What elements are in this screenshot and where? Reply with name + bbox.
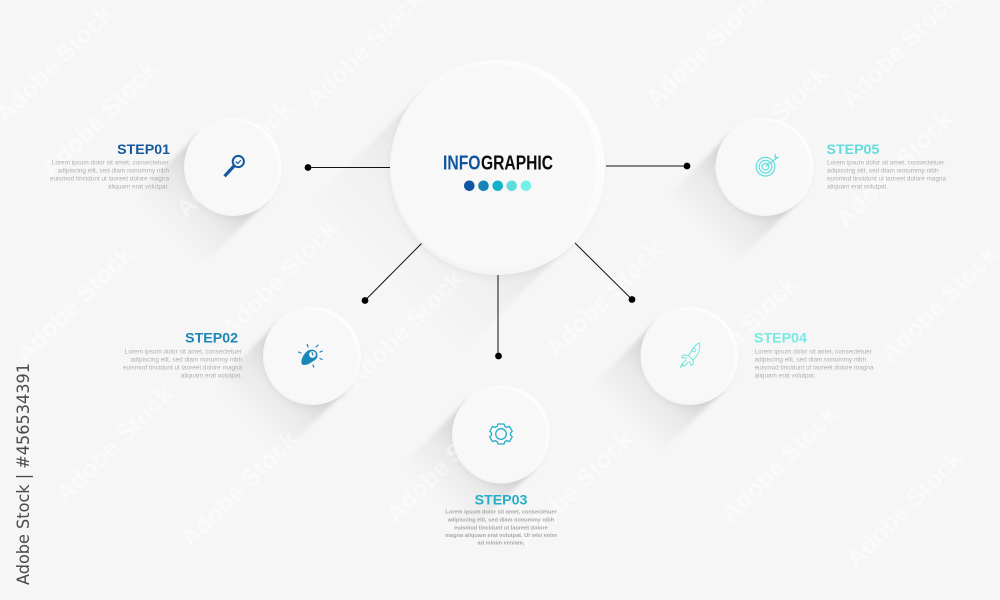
stock watermarks: Adobe Stock [830, 105, 958, 233]
stock watermarks: Adobe Stock [715, 400, 843, 528]
center title dark part: GRAPHIC [481, 152, 553, 174]
step 05 text: aliquam erat volutpat. [827, 184, 888, 190]
stock watermarks: Adobe Stock [170, 95, 298, 223]
step 02 text: Lorem ipsum dolor sit amet, consectetuer [125, 348, 243, 356]
step 05 text [826, 142, 946, 190]
icon: gear [490, 424, 512, 444]
icon: light bulb [298, 344, 322, 367]
step 04 text: adipiscing elit, sed diam nonummy nibh [754, 356, 866, 364]
connector to step 05 [606, 163, 690, 169]
connector to step 02 [362, 243, 422, 304]
icon: target [756, 154, 778, 176]
step 04 circle [640, 307, 738, 407]
stock watermarks: Adobe Stock [675, 270, 803, 398]
step 02 circle [263, 307, 361, 407]
stock watermarks: Adobe Stock [380, 400, 508, 528]
step 02 text: euismod tincidunt ut laoreet dolore magna [123, 364, 242, 372]
stock watermarks: Adobe Stock [540, 235, 668, 363]
icon: rocket [680, 343, 700, 368]
step 03 text: ad minim veniam, [478, 540, 525, 546]
step 04 text: STEP04 [754, 330, 807, 346]
step 03 text [445, 492, 557, 546]
stock watermarks: Adobe Stock [510, 425, 638, 553]
step 02 text: adipiscing elit, sed diam nonummy nibh [130, 356, 242, 364]
step 05 text: euismod tincidunt ut laoreet dolore magna [827, 176, 946, 182]
step 03 circle [452, 386, 550, 486]
stock watermarks: Adobe Stock [50, 380, 178, 508]
stock watermarks: Adobe Stock [175, 425, 303, 553]
step 02 text: aliquam erat volutpat. [181, 372, 242, 380]
stock watermarks: Adobe Stock [875, 240, 1000, 368]
center circle [389, 60, 605, 278]
step 01 circle [184, 118, 282, 218]
step 03 text: Lorem ipsum dolor sit amet, consectetuer [445, 510, 557, 516]
vertical stock id: Adobe Stock | #456534391 [14, 363, 34, 585]
stock watermarks: Adobe Stock [840, 445, 968, 573]
step 01 text: aliquam erat volutpat. [108, 184, 169, 190]
colour dots [464, 180, 531, 191]
connector lines [305, 163, 690, 359]
step 04 text: Lorem ipsum dolor sit amet, consectetuer [754, 348, 873, 356]
step 03 text: STEP03 [475, 492, 528, 508]
step 02 text [123, 330, 243, 380]
step 01 text: STEP01 [117, 142, 170, 158]
step 05 text: STEP05 [826, 142, 879, 158]
stock watermarks: Adobe Stock [340, 265, 468, 393]
connector to step 04 [575, 243, 635, 303]
long shadows [134, 92, 798, 533]
center title: INFO [443, 152, 481, 174]
step 02 text: STEP02 [185, 330, 238, 346]
stock watermarks: Adobe Stock [35, 55, 163, 183]
stock watermarks: Adobe Stock [705, 60, 833, 188]
stock watermarks: Adobe Stock [215, 215, 343, 343]
step 01 text: adipiscing elit, sed diam nonummy nibh [57, 168, 169, 174]
stock watermarks: Adobe Stock [10, 240, 138, 368]
step 04 text: aliquam erat volutpat. [754, 372, 816, 380]
step 04 text: euismod tincidunt ut laoreet dolore magna [754, 364, 874, 372]
step 04 text [754, 330, 874, 380]
step 01 text: euismod tincidunt ut laoreet dolore magna [50, 176, 169, 182]
step 05 circle [716, 118, 814, 218]
connector to step 03 [495, 275, 502, 359]
step 01 text: Lorem ipsum dolor sit amet, consectetuer [52, 160, 170, 166]
connector to step 01 [305, 164, 390, 171]
step 05 text: Lorem ipsum dolor sit amet, consectetuer [827, 160, 945, 166]
step 05 text: adipiscing elit, sed diam nonummy nibh [827, 168, 939, 174]
step 03 text: adipiscing elit, sed diam nonummy nibh [448, 518, 555, 524]
step 01 text [50, 142, 170, 190]
icon: magnifier [224, 156, 244, 176]
step 03 text: magna aliquam erat volutpat. Ut wisi enim [445, 533, 557, 539]
step 03 text: euismod tincidunt ut laoreet dolore [454, 526, 548, 532]
